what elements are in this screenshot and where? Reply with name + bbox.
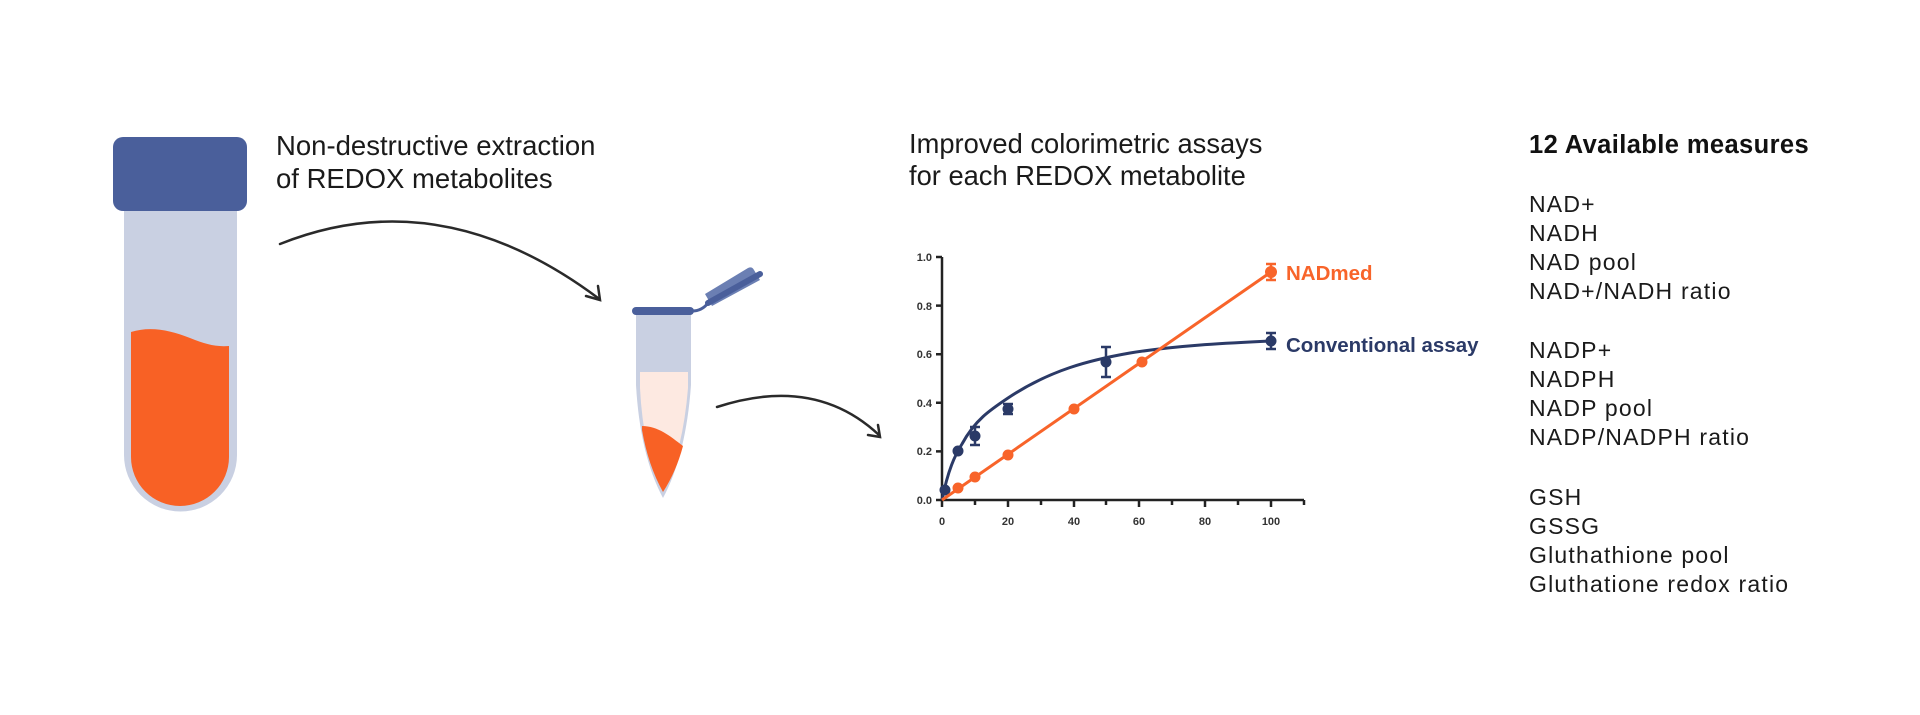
list: measures: NAD+/NADH ratio xyxy=(1529,278,1732,304)
arrow: microtube to chart xyxy=(717,396,880,437)
text: assay caption: for each REDOX metabolite xyxy=(909,160,1246,191)
text: extraction caption: Non-destructive extraction xyxy=(276,130,595,161)
text: extraction caption: of REDOX metabolites xyxy=(276,163,553,194)
arrow: tube to microtube xyxy=(280,221,600,300)
chart: calibration curves: 0.6 xyxy=(917,349,932,361)
text: assay caption: Improved colorimetric assays xyxy=(909,128,1262,159)
list: measures: GSSG xyxy=(1529,513,1600,539)
chart: calibration curves: 0.8 xyxy=(917,301,932,313)
list: measures: NADH xyxy=(1529,220,1599,246)
chart: calibration curves: 20 xyxy=(1002,516,1014,528)
list: measures xyxy=(1529,191,1789,597)
chart: calibration curves xyxy=(917,252,1479,528)
list: measures: NAD+ xyxy=(1529,191,1596,217)
icon: microtube xyxy=(632,267,760,498)
legend: NADmed: NADmed xyxy=(1286,262,1373,285)
list: measures: NADP/NADPH ratio xyxy=(1529,424,1750,450)
list: measures: NADP+ xyxy=(1529,337,1612,363)
list: measures: GSH xyxy=(1529,484,1582,510)
list: measures: NAD pool xyxy=(1529,249,1637,275)
heading: available measures: 12 Available measures xyxy=(1529,131,1809,159)
chart: calibration curves: 60 xyxy=(1133,516,1145,528)
chart: calibration curves: 0.4 xyxy=(917,398,933,410)
list: measures: Gluthatione redox ratio xyxy=(1529,571,1789,597)
chart: calibration curves: 0 xyxy=(939,516,945,528)
chart: calibration curves: 100 xyxy=(1262,516,1280,528)
chart: calibration curves: 80 xyxy=(1199,516,1211,528)
chart: calibration curves: 0.2 xyxy=(917,446,932,458)
chart: calibration curves: 40 xyxy=(1068,516,1080,528)
series: conventional assay xyxy=(940,333,1276,500)
legend: conventional assay: Conventional assay xyxy=(1286,334,1479,357)
list: measures: NADP pool xyxy=(1529,395,1653,421)
icon: large test tube xyxy=(113,137,247,512)
chart: calibration curves: 1.0 xyxy=(917,252,932,264)
list: measures: NADPH xyxy=(1529,366,1616,392)
chart: calibration curves: 0.0 xyxy=(917,495,932,507)
list: measures: Gluthathione pool xyxy=(1529,542,1730,568)
series: NADmed xyxy=(942,264,1276,500)
